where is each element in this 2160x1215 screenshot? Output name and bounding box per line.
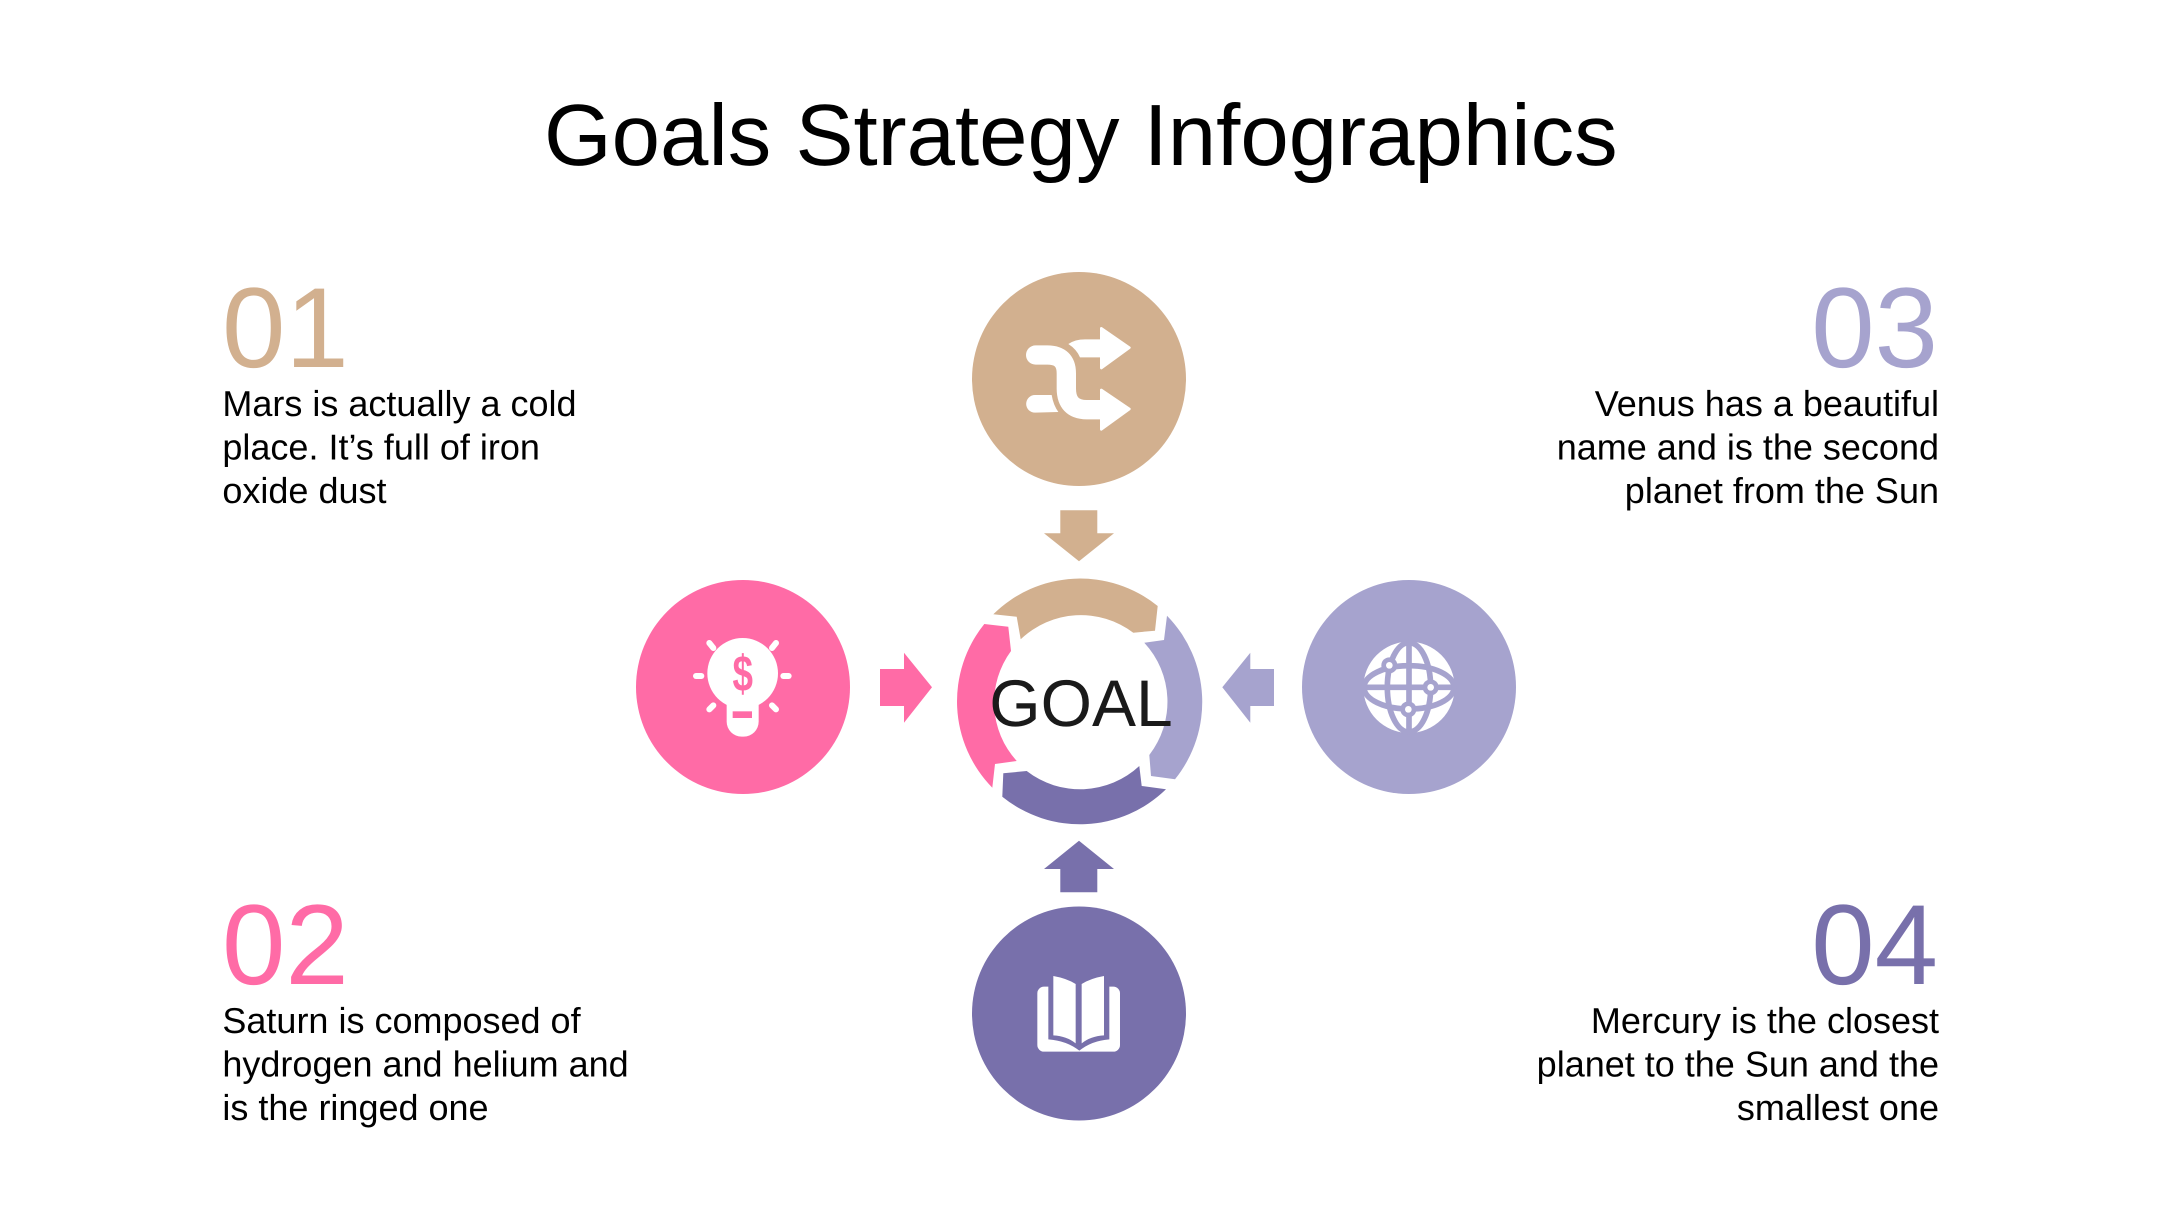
number 03: 03: [1811, 265, 1938, 392]
panel: item 03 text: [1557, 265, 1939, 511]
description 01: Mars is actually a cold: [222, 383, 577, 424]
description 03: Venus has a beautiful: [1595, 383, 1939, 424]
ring segment: tan: [993, 579, 1158, 639]
title: Goals Strategy Infographics: [544, 87, 1618, 184]
description 03: planet from the Sun: [1625, 470, 1939, 511]
description 04: Mercury is the closest: [1591, 1000, 1939, 1041]
number 04: 04: [1811, 882, 1938, 1009]
description 02: hydrogen and helium and: [222, 1044, 629, 1084]
description 02: is the ringed one: [222, 1087, 489, 1128]
arrow: left, pointing right: [880, 653, 932, 723]
icon circle: shuffle (top, tan): [972, 272, 1186, 486]
description 04: planet to the Sun and the: [1537, 1044, 1939, 1084]
ring segment: purple: [1002, 766, 1166, 824]
icon circle: open book (bottom, purple): [972, 906, 1186, 1120]
description 01: place. It’s full of iron: [222, 426, 540, 468]
arrow: top, pointing down: [1044, 510, 1114, 561]
icon circle: light bulb (left, pink): $: [732, 645, 753, 702]
panel: item 01 text: [222, 265, 577, 511]
number 01: 01: [222, 265, 349, 392]
number 02: 02: [222, 882, 349, 1009]
goal label: GOAL: [989, 666, 1173, 740]
arrow: bottom, pointing up: [1044, 841, 1114, 892]
panel: item 04 text: [1537, 882, 1939, 1128]
ring segment: pink: [957, 624, 1017, 788]
description 01: oxide dust: [222, 470, 387, 511]
description 02: Saturn is composed of: [222, 1000, 582, 1041]
icon circle: light bulb (left, pink): [636, 580, 850, 794]
icon circle: globe (right, lilac): [1302, 580, 1516, 794]
goal ring: [957, 579, 1202, 824]
panel: item 02 text: [222, 882, 629, 1128]
description 04: smallest one: [1737, 1087, 1939, 1128]
description 03: name and is the second: [1557, 426, 1939, 468]
arrow: right, pointing left: [1222, 653, 1274, 723]
ring segment: lilac: [1144, 616, 1202, 779]
